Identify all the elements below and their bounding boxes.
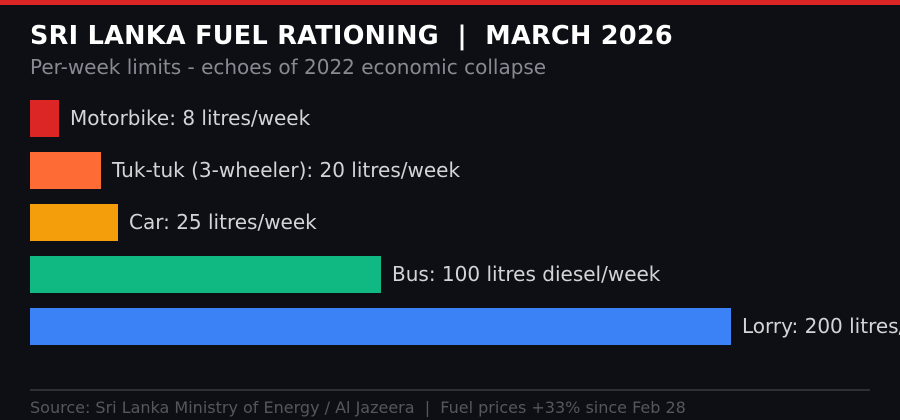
bar: tuk-tuk: [30, 152, 101, 189]
label: bus: Bus: 100 litres diesel/week: [392, 262, 660, 286]
bar: car: [30, 204, 118, 241]
footer source: Source: Sri Lanka Ministry of Energy / Al Jazeera | Fuel prices +33% since Feb 28: [30, 398, 686, 417]
bar: lorry: [30, 308, 731, 345]
label: car: Car: 25 litres/week: [129, 210, 317, 234]
top accent bar: [0, 0, 900, 5]
subtitle: Per-week limits - echoes of 2022 economic collapse: [30, 55, 546, 79]
label: motorbike: Motorbike: 8 litres/week: [70, 106, 310, 130]
bar: motorbike: [30, 100, 59, 137]
title: SRI LANKA FUEL RATIONING | MARCH 2026: [30, 21, 673, 51]
bar chart: [30, 100, 900, 345]
bar: bus: [30, 256, 381, 293]
label: tuk-tuk: Tuk-tuk (3-wheeler): 20 litres/week: [112, 158, 460, 182]
